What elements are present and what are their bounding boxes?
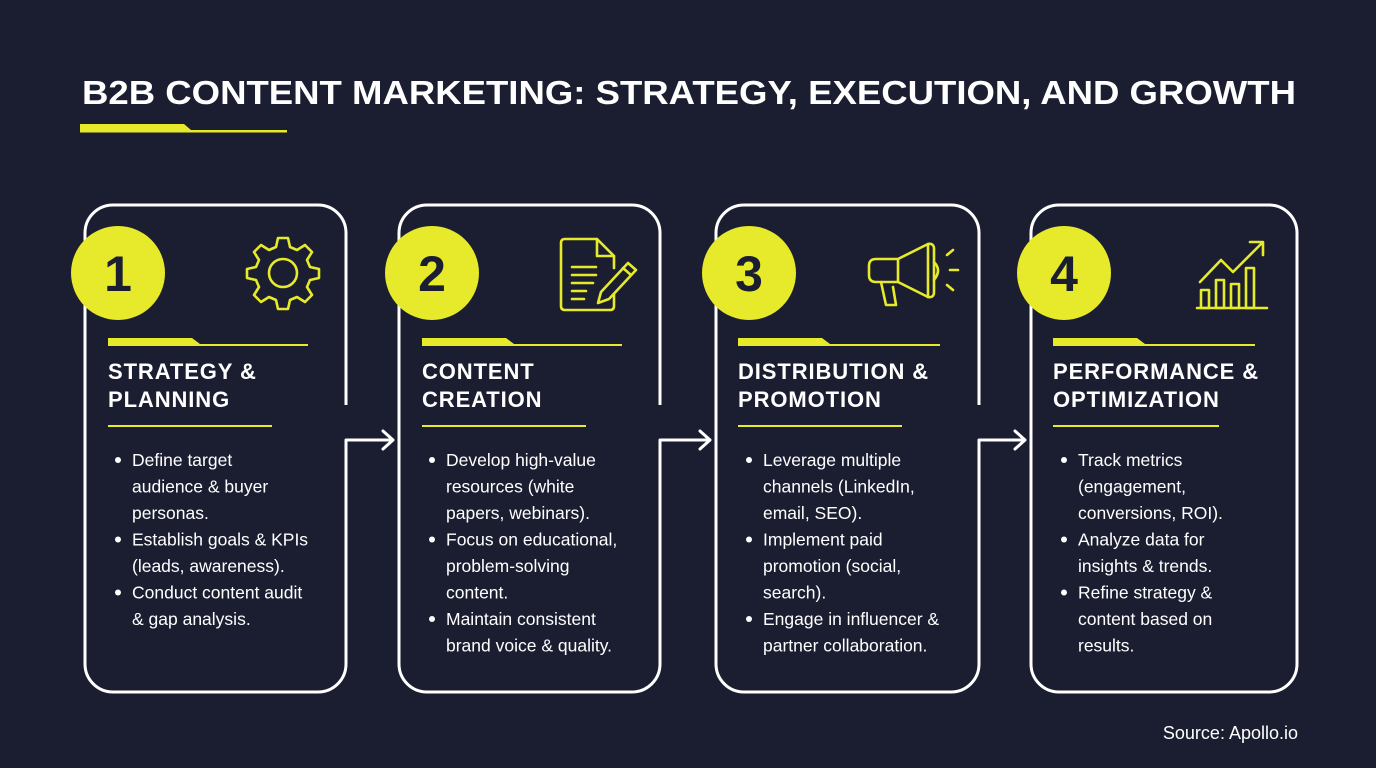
panel: distribution & promotion: partner collaboration. xyxy=(763,636,927,656)
panel: strategy & planning: personas. xyxy=(132,503,209,523)
panel: performance & optimization: conversions, ROI). xyxy=(1078,503,1223,523)
panel: content creation: CREATION xyxy=(422,387,542,412)
panel: strategy & planning: & gap analysis. xyxy=(132,609,251,629)
panel: content creation: Develop high-value xyxy=(446,450,596,470)
panel: performance & optimization: insights & trends. xyxy=(1078,556,1212,576)
panel: distribution & promotion: Leverage multiple xyxy=(763,450,901,470)
panel: strategy & planning: audience & buyer xyxy=(132,476,268,496)
panel: content creation: content. xyxy=(446,582,508,602)
panel: content creation: 2 xyxy=(418,246,446,302)
source note: Source: Apollo.io xyxy=(1163,723,1298,743)
panel: performance & optimization: Refine strategy & xyxy=(1078,582,1213,602)
panel: strategy & planning: Conduct content audit xyxy=(132,582,302,602)
arrow: 1 to 2 xyxy=(346,431,393,449)
panel: distribution & promotion: email, SEO). xyxy=(763,503,862,523)
panel: strategy & planning: Establish goals & KPIs xyxy=(132,530,308,550)
panel: strategy & planning: PLANNING xyxy=(108,387,230,412)
panel: content creation: Maintain consistent xyxy=(446,609,596,629)
panel: distribution & promotion: Implement paid xyxy=(763,530,883,550)
panel: distribution & promotion: Engage in influencer & xyxy=(763,609,939,629)
panel: distribution & promotion: promotion (social, xyxy=(763,556,901,576)
panel: strategy & planning: STRATEGY & xyxy=(108,359,257,384)
title xyxy=(80,74,1296,132)
panel: content creation: Focus on educational, xyxy=(446,530,617,550)
panel: performance & optimization: PERFORMANCE & xyxy=(1053,359,1259,384)
panel: strategy & planning: 1 xyxy=(104,246,132,302)
panel: content creation: resources (white xyxy=(446,476,574,496)
panel: distribution & promotion: DISTRIBUTION & xyxy=(738,359,929,384)
panel: content creation: brand voice & quality. xyxy=(446,636,612,656)
panel: performance & optimization: results. xyxy=(1078,636,1134,656)
panel: distribution & promotion: channels (LinkedIn, xyxy=(763,476,915,496)
panel: performance & optimization: OPTIMIZATION xyxy=(1053,387,1220,412)
panel: content creation: papers, webinars). xyxy=(446,503,590,523)
panel: distribution & promotion xyxy=(702,205,979,692)
panel: distribution & promotion: 3 xyxy=(735,246,763,302)
panel: strategy & planning: (leads, awareness). xyxy=(132,556,285,576)
panel: strategy & planning xyxy=(71,205,346,692)
panel: performance & optimization xyxy=(1017,205,1297,692)
panel: performance & optimization: (engagement, xyxy=(1078,476,1186,496)
panel: content creation xyxy=(385,205,660,692)
panel: content creation: CONTENT xyxy=(422,359,535,384)
panel: strategy & planning: Define target xyxy=(132,450,232,470)
panel: performance & optimization: 4 xyxy=(1050,246,1078,302)
panel: distribution & promotion: search). xyxy=(763,582,826,602)
arrow: 2 to 3 xyxy=(660,431,710,449)
panel: performance & optimization: Analyze data for xyxy=(1078,530,1205,550)
title: B2B CONTENT MARKETING: STRATEGY, EXECUTION, AND GROWTH xyxy=(82,74,1296,111)
panel: distribution & promotion: PROMOTION xyxy=(738,387,882,412)
panel: performance & optimization: Track metrics xyxy=(1078,450,1183,470)
arrow: 3 to 4 xyxy=(979,431,1025,449)
panel: content creation: problem-solving xyxy=(446,556,570,576)
panel: performance & optimization: content based on xyxy=(1078,609,1212,629)
